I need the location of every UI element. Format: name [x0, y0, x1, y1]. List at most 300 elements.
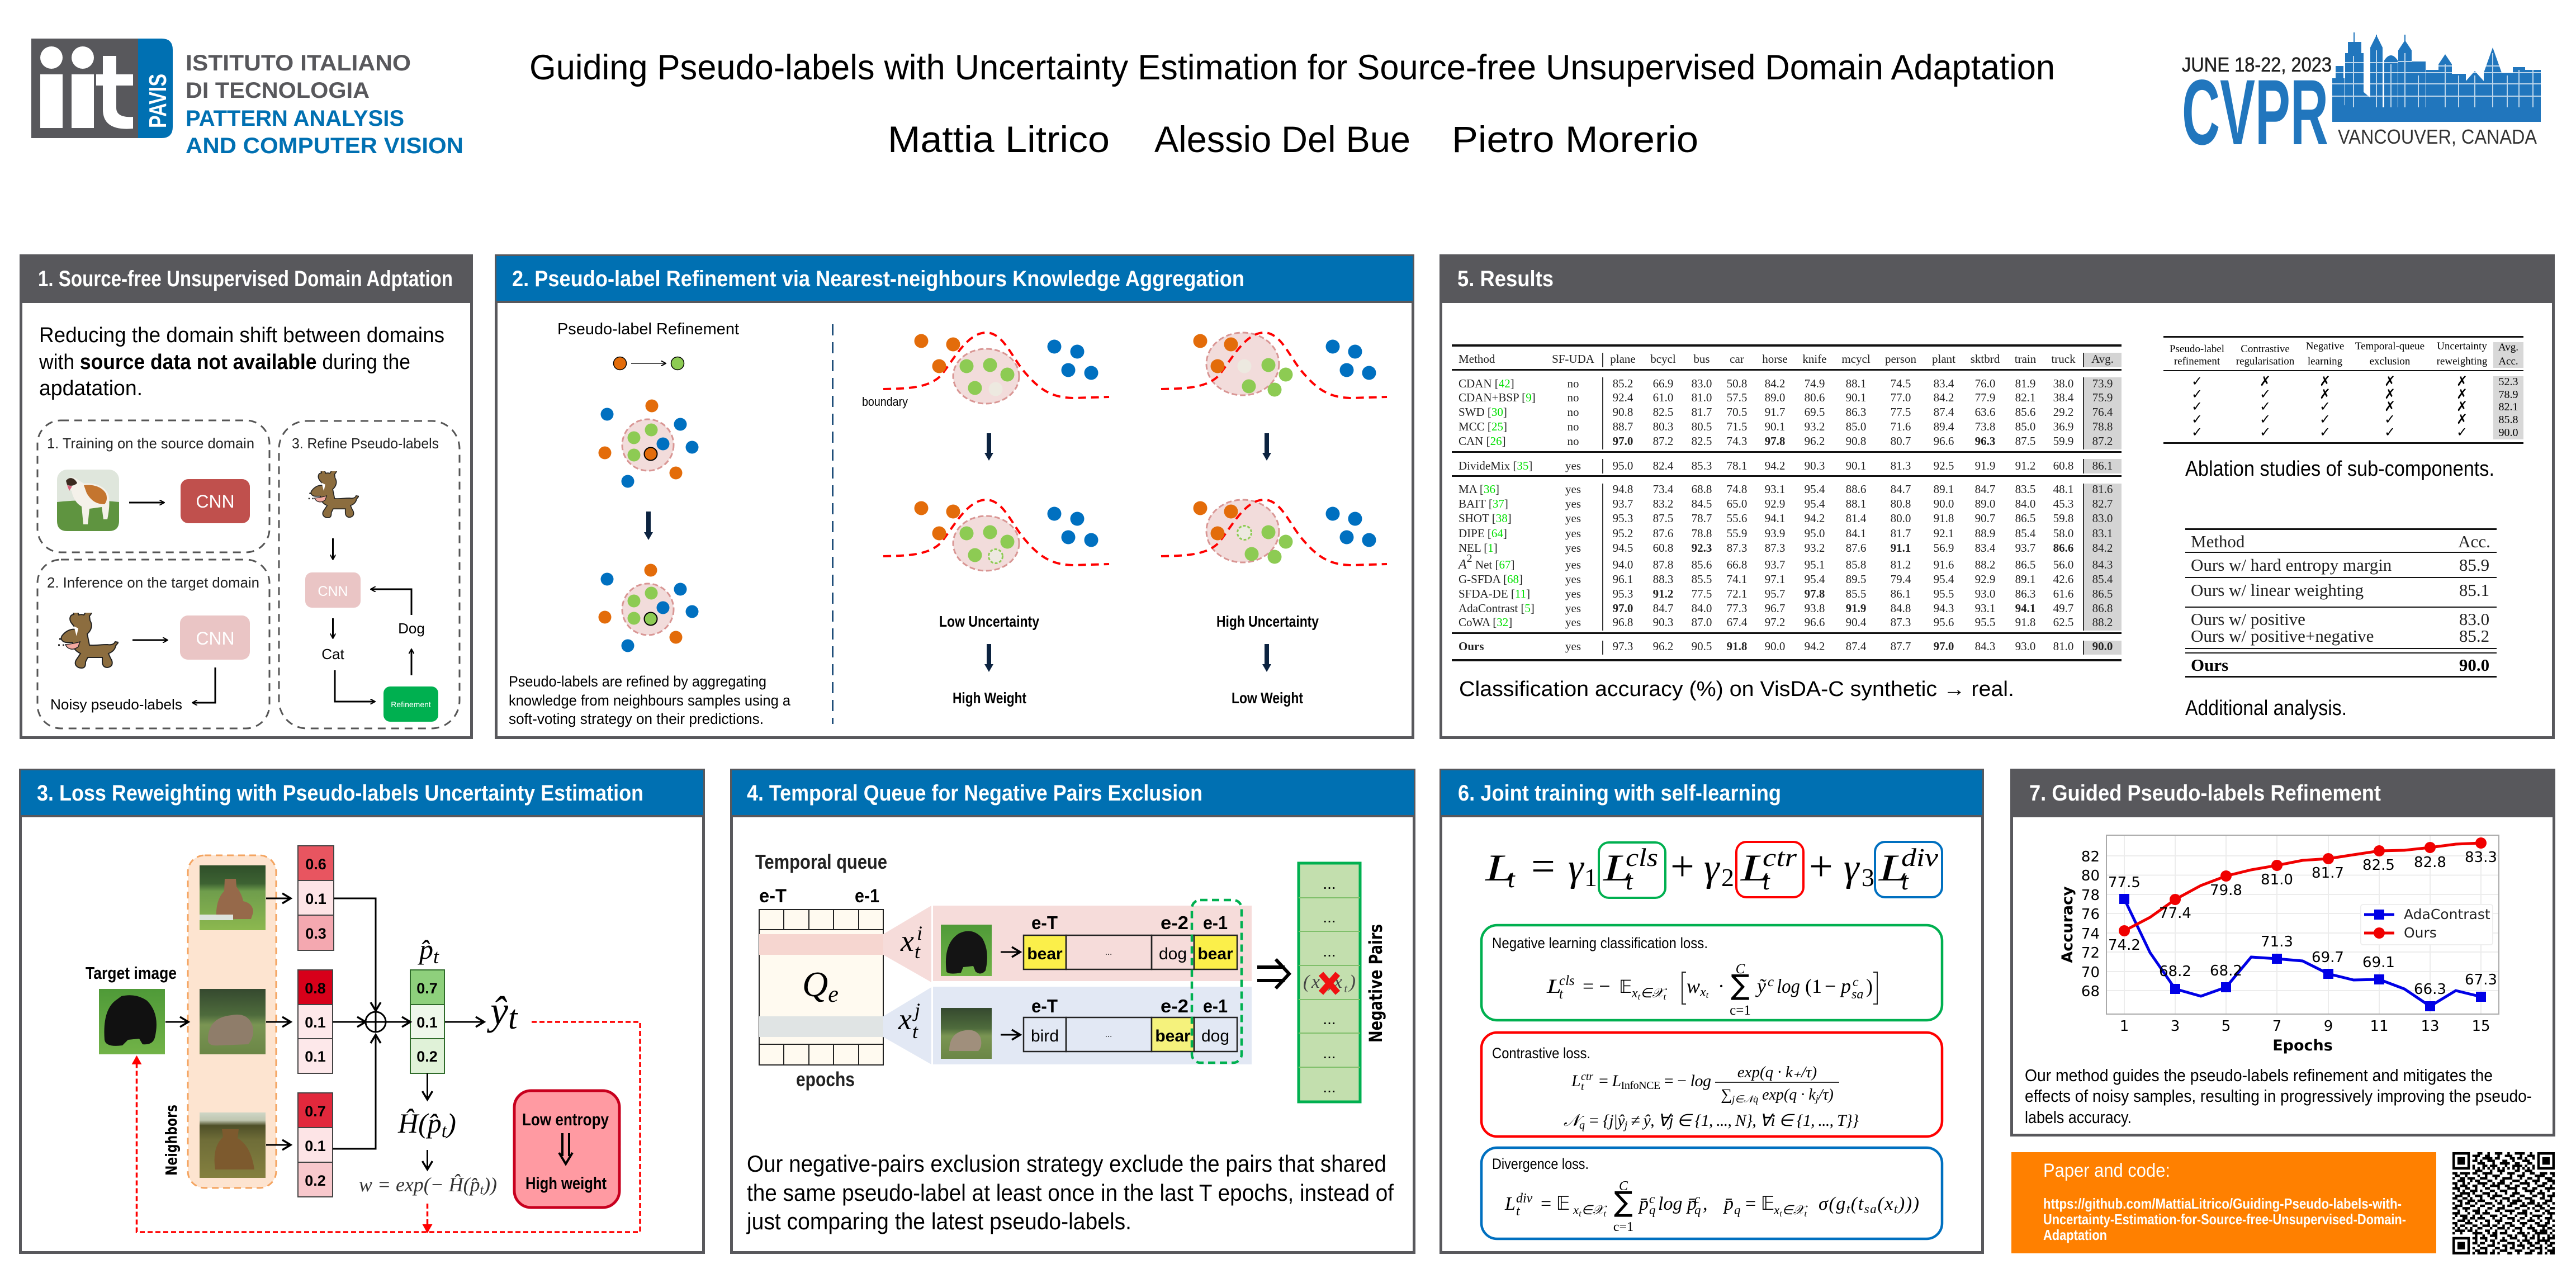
- ablation table: [2163, 336, 2523, 444]
- pseudo-label column: [410, 970, 444, 1073]
- prob column 3: [298, 1093, 333, 1197]
- divergence loss box: t: [1579, 1209, 1581, 1219]
- main loss equation: 1: [1584, 863, 1597, 892]
- row: sample j: ...: [1105, 1030, 1112, 1039]
- row: sample i: bear: [1027, 945, 1063, 963]
- ablation table: ✓: [2456, 424, 2468, 440]
- divergence loss box: = 𝔼: [1745, 1194, 1774, 1214]
- CNN red: [181, 479, 250, 523]
- results table: 87.2: [2092, 434, 2113, 448]
- contrastive loss box: ≠ ŷ, ∀j ∈ {1, ..., N}, ∀i ∈ {1, ..., T}}: [1627, 1111, 1859, 1130]
- ablation table: ✓: [2191, 424, 2203, 440]
- probability values: 0.1: [305, 1014, 326, 1031]
- arrow down: [644, 512, 653, 540]
- additional analysis table: Method: [2191, 532, 2245, 551]
- results table: 81.3: [1891, 459, 1911, 472]
- additional analysis table: 85.1: [2459, 580, 2489, 600]
- label: high uncertainty: High Uncertainty: [1216, 613, 1319, 630]
- scene: low uncertainty before: boundary: [862, 395, 908, 409]
- row: sample i: e-1: [1203, 912, 1228, 933]
- results table: 86.5: [2092, 587, 2113, 600]
- main loss equation: γ: [1844, 846, 1860, 889]
- dog: Dog: [398, 620, 425, 637]
- results table: 89.0: [1975, 497, 1995, 510]
- results table: 50.8: [1727, 377, 1747, 390]
- header 3: [19, 769, 705, 817]
- results table: 95.4: [1805, 482, 1825, 496]
- y axis: 82: [2081, 849, 2100, 865]
- results table: no: [1568, 391, 1579, 404]
- panel: 4 temporal queue: [730, 769, 1415, 1252]
- classification loss box: x: [1632, 986, 1638, 1001]
- results table: no: [1568, 420, 1579, 433]
- results table: 91.2: [1653, 587, 1673, 600]
- p hat t: p̂: [419, 934, 433, 965]
- x axis: 3: [2171, 1018, 2180, 1035]
- results table: 94.2: [1765, 459, 1785, 472]
- data labels: 68.2: [2159, 963, 2191, 980]
- results table: 90.3: [1653, 615, 1673, 629]
- results table: 84.7: [1891, 482, 1911, 496]
- results table: 94.1: [1765, 512, 1785, 525]
- panel: 5 results: [1439, 254, 2555, 738]
- results table: yes: [1565, 497, 1581, 510]
- x axis: 11: [2370, 1018, 2389, 1035]
- header 6: 6. Joint training with self-learning: [1458, 781, 1781, 806]
- results table: 93.9: [1765, 527, 1785, 540]
- contrastive loss box: ctr: [1581, 1071, 1593, 1083]
- results table: 85.6: [1692, 558, 1712, 571]
- results table: 90.4: [1846, 615, 1867, 629]
- contrastive loss box: [1481, 1033, 1942, 1137]
- results table: 87.0: [1692, 615, 1712, 629]
- results table: MCC [25]: [1459, 420, 1507, 433]
- divergence loss box: t: [1516, 1204, 1521, 1219]
- results table: Method: [1459, 352, 1495, 366]
- divergence loss box: t: [1805, 1209, 1807, 1219]
- results table: 83.4: [1934, 377, 1954, 390]
- negative pairs list: ...: [1323, 875, 1336, 892]
- results table: yes: [1565, 602, 1581, 615]
- row: sample i: e-T: [1031, 912, 1058, 933]
- classification loss box: log: [1777, 975, 1800, 997]
- prob column 1: [298, 846, 334, 950]
- results table: 83.0: [1692, 377, 1712, 390]
- ablation table: ✗: [2456, 399, 2468, 414]
- contrastive loss box: j: [1623, 1119, 1628, 1131]
- divergence loss box: t: [1603, 1209, 1607, 1219]
- description: Our method guides the pseudo-labels refinement and mitigates the: [2025, 1066, 2493, 1085]
- results table: 95.4: [1805, 497, 1825, 510]
- results table: 59.9: [2053, 434, 2073, 448]
- y axis: [2081, 849, 2100, 1000]
- main loss equation: ctr: [1763, 843, 1797, 872]
- classification loss box: c: [1853, 975, 1859, 989]
- results table: 87.3: [1727, 541, 1747, 555]
- results table: 81.7: [1891, 527, 1911, 540]
- box: inference on target: 2. Inference on the target domain: [47, 574, 259, 591]
- contrastive loss box: log: [1690, 1072, 1711, 1090]
- results table: 74.1: [1727, 572, 1747, 586]
- results table: 88.7: [1613, 420, 1633, 433]
- results table: person: [1885, 352, 1916, 366]
- results table: 91.8: [1727, 640, 1747, 653]
- dog photo: [57, 470, 119, 531]
- CNN pink: [180, 615, 250, 660]
- main loss equation: +: [1670, 843, 1694, 890]
- series: Ours: [2119, 837, 2487, 936]
- panel: paper and code: Adaptation: [2043, 1227, 2107, 1243]
- results table: 95.3: [1613, 512, 1633, 525]
- results table: yes: [1565, 558, 1581, 571]
- label: high weight: High Weight: [953, 689, 1026, 707]
- scene: high uncertainty before: [1161, 333, 1387, 398]
- results table: Avg.: [2091, 352, 2114, 366]
- results table: [1452, 344, 2122, 661]
- results table: 93.7: [1613, 497, 1633, 510]
- results table: 74.8: [1727, 482, 1747, 496]
- results table: A: [1457, 557, 1467, 572]
- classification loss box: x: [1699, 985, 1706, 1000]
- results table: 89.1: [1934, 482, 1954, 496]
- data labels: 68.2: [2210, 963, 2242, 979]
- results table: 97.0: [1934, 640, 1954, 653]
- results table: 93.7: [2015, 541, 2035, 555]
- row: sample j: t: [912, 1020, 918, 1043]
- results table: 80.6: [1805, 391, 1825, 404]
- entropy formula: Ĥ(p̂: [398, 1107, 442, 1139]
- main loss equation: L: [1740, 846, 1770, 889]
- classification loss box: Negative learning classification loss.: [1492, 935, 1708, 951]
- data labels: 67.3: [2465, 972, 2497, 988]
- logo: iit pavis: DI TECNOLOGIA: [186, 78, 370, 103]
- results table: knife: [1802, 352, 1827, 366]
- authors: Mattia Litrico: [888, 119, 1110, 160]
- logo: CVPR 2023: [2182, 32, 2541, 164]
- results table: 91.8: [1934, 512, 1954, 525]
- y axis: 76: [2081, 906, 2100, 923]
- data labels: 82.5: [2362, 857, 2395, 874]
- probability values: 0.2: [305, 1172, 326, 1189]
- classification loss box: c=1: [1730, 1003, 1751, 1018]
- weight formula: t: [480, 1183, 484, 1197]
- results table: 74.3: [1727, 434, 1747, 448]
- ablation table: ✗: [2384, 386, 2395, 402]
- ablation table: Acc.: [2498, 356, 2518, 367]
- implies arrow: [1257, 959, 1289, 988]
- results table: 86.5: [2015, 512, 2035, 525]
- results table: 2: [1467, 552, 1472, 565]
- results table: 58.0: [2053, 527, 2073, 540]
- y axis: 80: [2081, 868, 2100, 884]
- classification loss box: ∑: [1731, 969, 1750, 1001]
- additional analysis table: 85.2: [2459, 626, 2489, 646]
- results table: 81.7: [1692, 405, 1712, 419]
- results table: 84.7: [1653, 602, 1673, 615]
- results table: 59.8: [2053, 512, 2073, 525]
- classification loss box: (: [1805, 975, 1812, 997]
- panel: paper and code: Uncertainty-Estimation-for-Source-free-Unsupervised-Domain-: [2043, 1211, 2406, 1228]
- results table: 74.9: [1805, 377, 1825, 390]
- results table: 85.4: [2092, 572, 2113, 586]
- header 5: 5. Results: [1457, 267, 1554, 291]
- panel: paper and code: Paper and code:: [2043, 1160, 2170, 1181]
- box: refine pseudo-labels: [279, 421, 460, 728]
- box: refine pseudo-labels: 3. Refine Pseudo-labels: [292, 435, 439, 452]
- results table: 96.2: [1653, 640, 1673, 653]
- negative pairs list: (x: [1303, 972, 1320, 992]
- results table: 97.0: [1613, 434, 1633, 448]
- panel: 1 source-free UDA: [20, 254, 473, 738]
- description: Pseudo-labels are refined by aggregating: [509, 673, 766, 690]
- results table: 83.1: [2092, 527, 2113, 540]
- refinement: [383, 686, 438, 722]
- label: low uncertainty: Low Uncertainty: [939, 613, 1039, 630]
- results table: 87.3: [1891, 615, 1911, 629]
- results table: 91.8: [2015, 615, 2035, 629]
- results table: 55.6: [1727, 512, 1747, 525]
- main loss equation: L: [1485, 846, 1514, 889]
- results table: 79.4: [1891, 572, 1911, 586]
- row: sample j: bear: [1155, 1027, 1191, 1045]
- row: sample i: x: [900, 924, 914, 958]
- logo: iit pavis: PATTERN ANALYSIS: [186, 106, 404, 131]
- divergence loss box: sa: [1864, 1202, 1877, 1216]
- divergence loss box: = 𝔼: [1541, 1194, 1570, 1214]
- results table: sktbrd: [1971, 352, 2000, 366]
- weight formula: )): [482, 1173, 497, 1196]
- results table: yes: [1565, 640, 1581, 653]
- results table: 81.0: [1692, 391, 1712, 404]
- header 1: 1. Source-free Unsupervised Domain Adptation: [38, 267, 453, 291]
- authors: Alessio Del Bue: [1154, 119, 1410, 160]
- data labels: 77.4: [2159, 905, 2191, 922]
- results table: 89.1: [2015, 572, 2035, 586]
- scene: low uncertainty after: [883, 500, 1109, 571]
- ablation table: ✓: [2191, 399, 2203, 414]
- results table: 65.0: [1727, 497, 1747, 510]
- negative pairs list: ...: [1323, 943, 1336, 960]
- probability values: 0.3: [305, 925, 326, 942]
- logo: iit pavis: ISTITUTO ITALIANO: [186, 51, 411, 75]
- description: knowledge from neighbours samples using a: [509, 692, 791, 709]
- y axis: 70: [2081, 964, 2100, 981]
- results table: 91.9: [1975, 459, 1995, 472]
- row: sample j: e-1: [1203, 996, 1228, 1016]
- additional analysis table: Ours w/ positive+negative: [2191, 626, 2374, 646]
- results table: 71.6: [1891, 420, 1911, 433]
- header 7: 7. Guided Pseudo-labels Refinement: [2029, 781, 2381, 806]
- divergence loss box: ∑: [1614, 1186, 1633, 1218]
- additional analysis table: Ours: [2191, 655, 2228, 675]
- description: [746, 1150, 1394, 1234]
- neighbors group: [162, 855, 276, 1188]
- data labels: 81.0: [2261, 872, 2293, 888]
- classification loss box: p: [1839, 975, 1851, 997]
- ablation table: ✗: [2456, 411, 2468, 427]
- classification loss box: 𝔼: [1619, 977, 1632, 997]
- results table: 93.8: [1805, 602, 1825, 615]
- panel: paper and code: https://github.com/MattiaLitrico/Guiding-Pseudo-labels-with-: [2043, 1195, 2402, 1212]
- results table: 92.5: [1934, 459, 1954, 472]
- results table: horse: [1762, 352, 1788, 366]
- results table: 38.4: [2053, 391, 2074, 404]
- negative pairs list: ...: [1323, 1010, 1336, 1027]
- results table: 81.2: [1891, 558, 1911, 571]
- row: sample i: i: [917, 922, 922, 944]
- QR code: [2452, 1153, 2555, 1253]
- divergence loss box: c: [1649, 1192, 1655, 1206]
- logo: CVPR 2023: CVPR: [2182, 61, 2328, 164]
- results table: 81.0: [2053, 640, 2073, 653]
- results table: 91.7: [1765, 405, 1785, 419]
- results table: 91.9: [1846, 602, 1866, 615]
- probability values: 0.1: [305, 891, 326, 907]
- classification loss box: 1: [1812, 975, 1822, 997]
- x axis: 9: [2324, 1018, 2333, 1035]
- legend: Ours: [2404, 925, 2437, 941]
- results table: 86.3: [1846, 405, 1866, 419]
- results table: 77.0: [1891, 391, 1911, 404]
- results table: 96.3: [1975, 434, 1995, 448]
- ablation table: ✓: [2260, 411, 2271, 427]
- queue: e-T: [759, 886, 787, 907]
- y hat t: t: [508, 999, 518, 1036]
- ablation table: ✓: [2384, 411, 2395, 427]
- panel: 6 joint training: [1439, 769, 1984, 1252]
- classification loss box: c: [1768, 974, 1774, 989]
- results table: 96.2: [1805, 434, 1825, 448]
- negative pairs list: ): [1348, 972, 1356, 992]
- classification loss box: −: [1825, 975, 1836, 997]
- main loss equation: 2: [1721, 863, 1734, 892]
- results table: 92.3: [1692, 541, 1712, 555]
- results table: 55.9: [1727, 527, 1747, 540]
- results table: 88.1: [1846, 377, 1866, 390]
- results table: 84.5: [1692, 497, 1712, 510]
- header 5: [1439, 254, 2555, 303]
- intro text: Reducing the domain shift between domains: [39, 324, 444, 347]
- ablation table: ✓: [2319, 399, 2331, 414]
- description: [509, 673, 791, 727]
- contrastive loss box: ∑: [1721, 1086, 1732, 1104]
- contrastive loss box: exp(q · k: [1758, 1086, 1816, 1104]
- results table: CDAN+BSP [9]: [1459, 391, 1536, 404]
- row: sample i: dog: [1159, 945, 1187, 963]
- low entropy callout: Low entropy: [522, 1110, 609, 1129]
- results table: Ours: [1459, 640, 1484, 653]
- results table: 85.3: [1692, 459, 1712, 472]
- divergence loss box: ))): [1897, 1194, 1919, 1214]
- description: labels accuracy.: [2025, 1107, 2132, 1127]
- classification loss box: sa: [1852, 987, 1863, 1002]
- results table: 75.9: [2092, 391, 2113, 404]
- results table: 95.6: [1934, 615, 1954, 629]
- results table: 97.2: [1765, 615, 1785, 629]
- results table: 62.5: [2053, 615, 2073, 629]
- divergence loss box: t: [1846, 1202, 1850, 1216]
- ablation table: ✗: [2384, 373, 2395, 389]
- results table: 80.0: [1891, 512, 1911, 525]
- ablation table: ✓: [2319, 411, 2331, 427]
- x axis: 7: [2272, 1018, 2281, 1035]
- divergence loss box: t: [1894, 1202, 1898, 1216]
- CNN pink: [305, 572, 361, 608]
- divergence loss box: x: [1774, 1203, 1779, 1217]
- results table: 81.6: [2092, 482, 2113, 496]
- results table: 90.1: [1846, 459, 1866, 472]
- legend: AdaContrast: [2404, 906, 2490, 922]
- main loss equation: t: [1901, 866, 1909, 895]
- results table: 87.2: [1653, 434, 1673, 448]
- results table: 84.1: [1846, 527, 1866, 540]
- results table: 61.0: [1653, 391, 1673, 404]
- results table: 68.8: [1692, 482, 1712, 496]
- results table: bus: [1693, 352, 1710, 366]
- divergence loss box: q: [1734, 1203, 1741, 1217]
- ablation table: Temporal-queue: [2355, 340, 2425, 352]
- ablation table: ✓: [2191, 386, 2203, 402]
- results table: 84.0: [1692, 602, 1712, 615]
- description: effects of noisy samples, resulting in progressively improving the pseudo-: [2025, 1086, 2532, 1106]
- probability values: 0.6: [305, 856, 326, 873]
- x axis title: Epochs: [2272, 1037, 2333, 1054]
- results table: 76.0: [1975, 377, 1995, 390]
- contrastive loss box: q: [1579, 1119, 1585, 1131]
- data labels: 71.3: [2261, 934, 2293, 950]
- results table: 78.8: [1692, 527, 1712, 540]
- divergence loss box: p̄: [1638, 1194, 1649, 1214]
- results table: 97.3: [1613, 640, 1633, 653]
- results table: SWD [30]: [1459, 405, 1507, 419]
- negative pairs list: ...: [1323, 1078, 1336, 1096]
- prob column 2: [298, 970, 333, 1073]
- cat: Cat: [321, 646, 345, 662]
- results table: CoWA [32]: [1459, 615, 1512, 629]
- arrows down row 1: [984, 433, 1271, 461]
- ablation table: Negative: [2306, 340, 2344, 352]
- results table: 57.5: [1727, 391, 1747, 404]
- intro text: apdatation.: [39, 377, 143, 400]
- p hat t: t: [433, 945, 439, 968]
- row: sample i: [883, 906, 1252, 982]
- results table: 78.8: [2092, 420, 2113, 433]
- y axis title: Accuracy: [2059, 886, 2076, 963]
- arrows down row 2: [984, 644, 1271, 672]
- results table: 89.5: [1846, 572, 1866, 586]
- main loss equation: div: [1901, 843, 1939, 872]
- row: sample j: e-2: [1161, 996, 1188, 1016]
- results table: 93.1: [1765, 482, 1785, 496]
- ablation table: ✓: [2191, 411, 2203, 427]
- series: AdaContrast: [2119, 894, 2486, 1011]
- results table: 87.5: [2015, 434, 2035, 448]
- results table: 78.7: [1692, 512, 1712, 525]
- label: temporal queue: Temporal queue: [755, 850, 887, 873]
- divergence loss box: L: [1504, 1194, 1516, 1214]
- contrastive loss box: InfoNCE: [1621, 1079, 1660, 1092]
- results table: 82.1: [2015, 391, 2035, 404]
- row: sample j: x: [898, 1002, 912, 1036]
- classification loss box: L: [1546, 975, 1561, 997]
- results table: 91.2: [2015, 459, 2035, 472]
- results table: 85.0: [2015, 420, 2035, 433]
- results table: 84.2: [2092, 541, 2113, 555]
- ablation table: ✓: [2384, 424, 2395, 440]
- cluster before: [598, 399, 699, 487]
- label: neighbors: Neighbors: [162, 1105, 181, 1176]
- results table: 90.0: [2092, 640, 2113, 653]
